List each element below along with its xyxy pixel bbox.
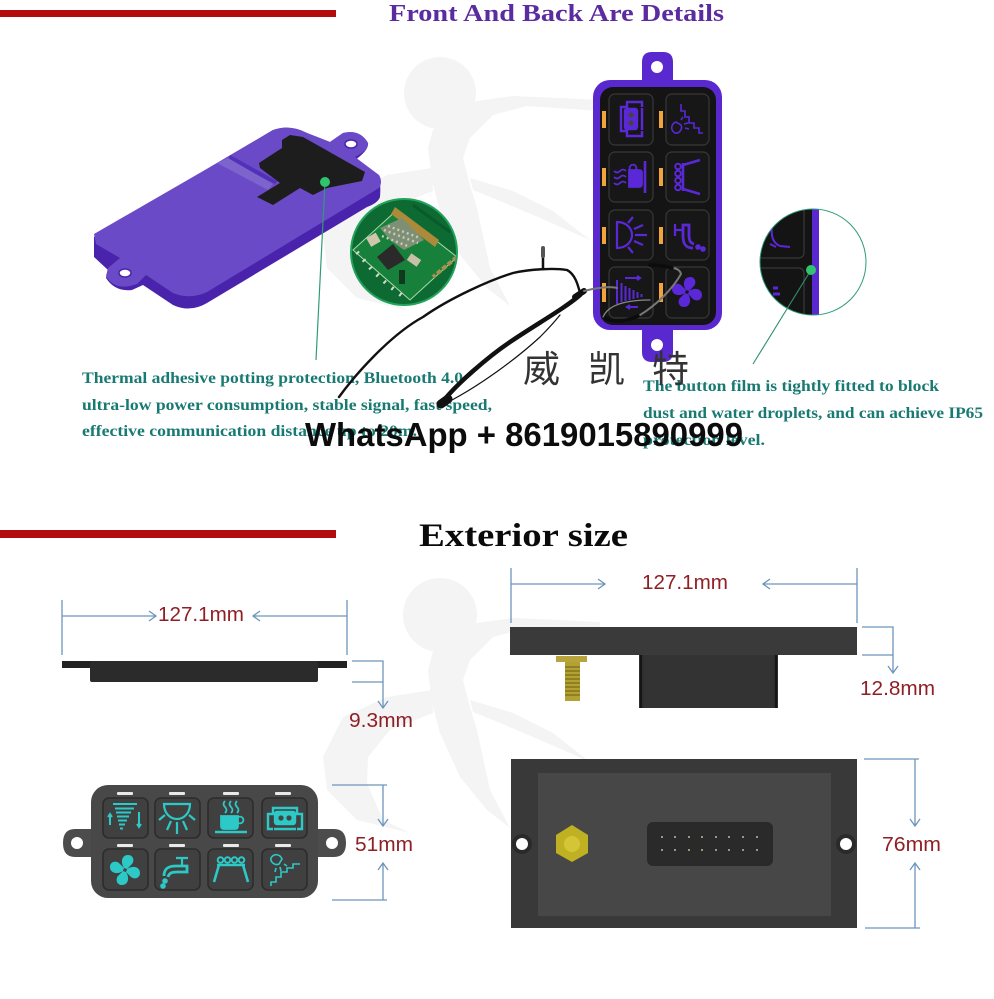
multi-pin connector [647,822,773,866]
dimension: height 51mm: 51mm [355,834,413,856]
red rule: top [0,10,336,17]
dimension: height 51mm [332,785,413,900]
dimension: height 76mm [864,759,941,928]
title: front and back: Front And Back Are Details [389,1,724,27]
dimension: width 127.1mm right [511,568,857,623]
white indicators [117,792,291,847]
black potting compound [257,135,365,205]
rear view: housing with connector [511,759,857,928]
keypad buttons [609,94,709,318]
purple button icons [614,102,704,309]
dimension: width 127.1mm right: 127.1mm [642,572,728,594]
inset magnifier: button film edge [753,209,866,364]
dimension: height 9.3mm [349,661,413,732]
text: potting description: effective communication distance up to 20m. [82,423,417,440]
dimension: height 12.8mm [860,627,935,700]
dimension: height 12.8mm: 12.8mm [860,678,935,700]
text: potting description [82,370,492,440]
side view: rear housing with bolt [510,627,857,708]
watermark: top figure [323,57,600,311]
text: potting description: ultra-low power consumption, stable signal, fast speed, [82,397,492,414]
dimension: height 9.3mm: 9.3mm [349,710,413,732]
front keypad: purple frame [593,52,722,362]
dimension: width 127.1mm left: 127.1mm [158,604,244,626]
circuit board detail [350,198,460,308]
dimension: height 76mm: 76mm [882,834,941,856]
whatsapp contact overlay: WhatsApp + 8619015890999 [305,416,743,453]
text: button film description: protection level. [643,432,765,449]
brass nut [556,825,588,862]
chinese brand watermark: 威凯特 [523,349,689,390]
dimension: width 127.1mm left [62,600,347,655]
red rule: exterior [0,530,336,538]
orange indicators [602,111,663,302]
text: potting description: Thermal adhesive potting protection, Bluetooth 4.0 [82,370,463,387]
text: button film description [643,378,983,449]
brush signature watermark [339,248,681,404]
grey buttons [103,798,307,890]
heading: exterior size: Exterior size [419,518,628,554]
back plate: purple enclosure [94,128,381,309]
watermark: bottom figure [323,578,600,833]
text: button film description: dust and water droplets, and can achieve IP65 [643,405,983,422]
front keypad: grey eight-button panel [63,785,346,898]
leader line: potting [316,177,330,360]
side view: thin front keypad [62,661,347,682]
teal button icons [108,801,302,887]
text: button film description: The button film is tightly fitted to block [643,378,939,395]
